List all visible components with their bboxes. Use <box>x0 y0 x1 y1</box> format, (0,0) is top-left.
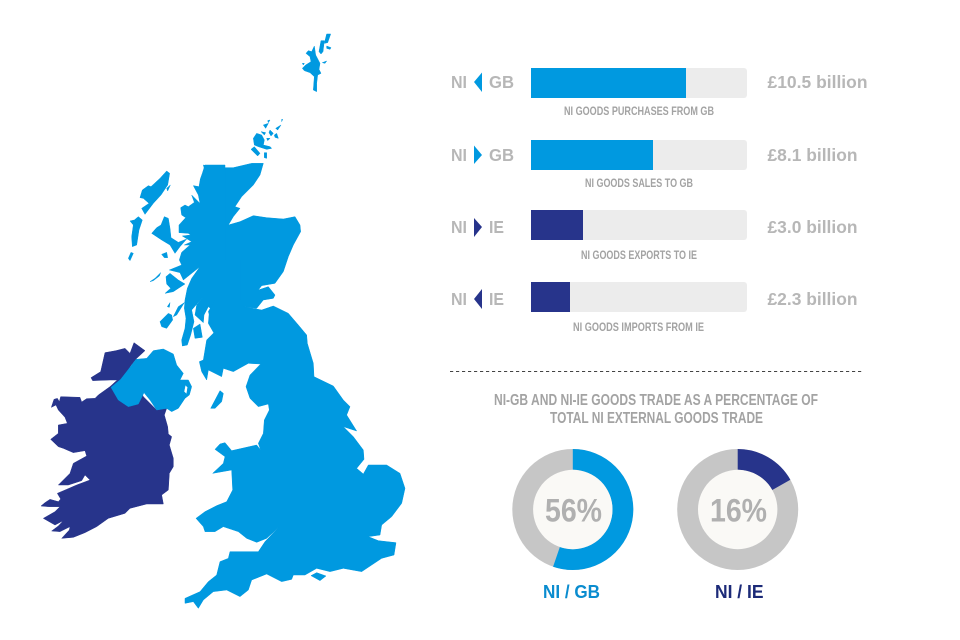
trade row: NI goods purchases from GB: GB <box>489 72 514 92</box>
row label: NI <box>451 289 467 309</box>
bar <box>531 140 747 170</box>
trade row: NI goods sales to GB: GB <box>489 145 514 165</box>
arrow: towards NI <box>474 289 482 309</box>
trade row: NI goods imports from IE <box>451 282 858 334</box>
map region: Shetland and Orkney <box>251 34 331 158</box>
bar <box>531 210 747 240</box>
row label: NI <box>451 145 467 165</box>
caption: NI GOODS PURCHASES FROM GB <box>564 106 714 118</box>
heading: percentage of trade: NI-GB AND NI-IE GOODS TRADE AS A PERCENTAGE OF <box>494 392 818 409</box>
heading: percentage of trade: TOTAL NI EXTERNAL GOODS TRADE <box>550 410 763 427</box>
trade row: NI goods exports to IE: IE <box>489 217 504 237</box>
value: £2.3 billion <box>768 289 858 309</box>
arrow: away from NI <box>474 146 482 164</box>
map region: Scotland north-west and Hebrides <box>128 165 225 265</box>
trade row: NI goods sales to GB <box>451 140 858 190</box>
bar <box>531 282 747 312</box>
map region: Scotland south-west and islands <box>150 260 240 360</box>
caption: NI GOODS SALES TO GB <box>585 178 693 190</box>
map region: Republic of Ireland <box>41 343 173 538</box>
arrow: away from NI <box>474 218 482 237</box>
donut chart: NI / IE 16% <box>677 449 798 570</box>
value: £8.1 billion <box>768 145 858 165</box>
map region: Northern Ireland <box>111 349 192 412</box>
donut chart: NI / GB 56%: 56% <box>545 492 602 528</box>
map region: Scotland east <box>203 163 307 345</box>
caption: NI GOODS IMPORTS FROM IE <box>573 322 704 334</box>
trade row: NI goods imports from IE: IE <box>489 289 504 309</box>
donut chart: NI / GB 56% <box>512 449 633 570</box>
donut label: NI / GB: NI / GB <box>543 582 600 602</box>
trade row: NI goods exports to IE <box>451 210 858 262</box>
map: UK and Ireland <box>41 34 405 608</box>
arrow: towards NI <box>474 72 482 92</box>
value: £10.5 billion <box>768 72 868 92</box>
row label: NI <box>451 72 467 92</box>
trade row: NI goods purchases from GB <box>451 68 868 118</box>
bar <box>531 68 747 98</box>
caption: NI GOODS EXPORTS TO IE <box>581 250 697 262</box>
row label: NI <box>451 217 467 237</box>
value: £3.0 billion <box>768 217 858 237</box>
donut label: NI / IE: NI / IE <box>715 582 764 602</box>
heading: percentage of trade <box>494 392 818 427</box>
map region: England and Wales <box>185 300 405 608</box>
donut chart: NI / IE 16%: 16% <box>710 492 767 528</box>
